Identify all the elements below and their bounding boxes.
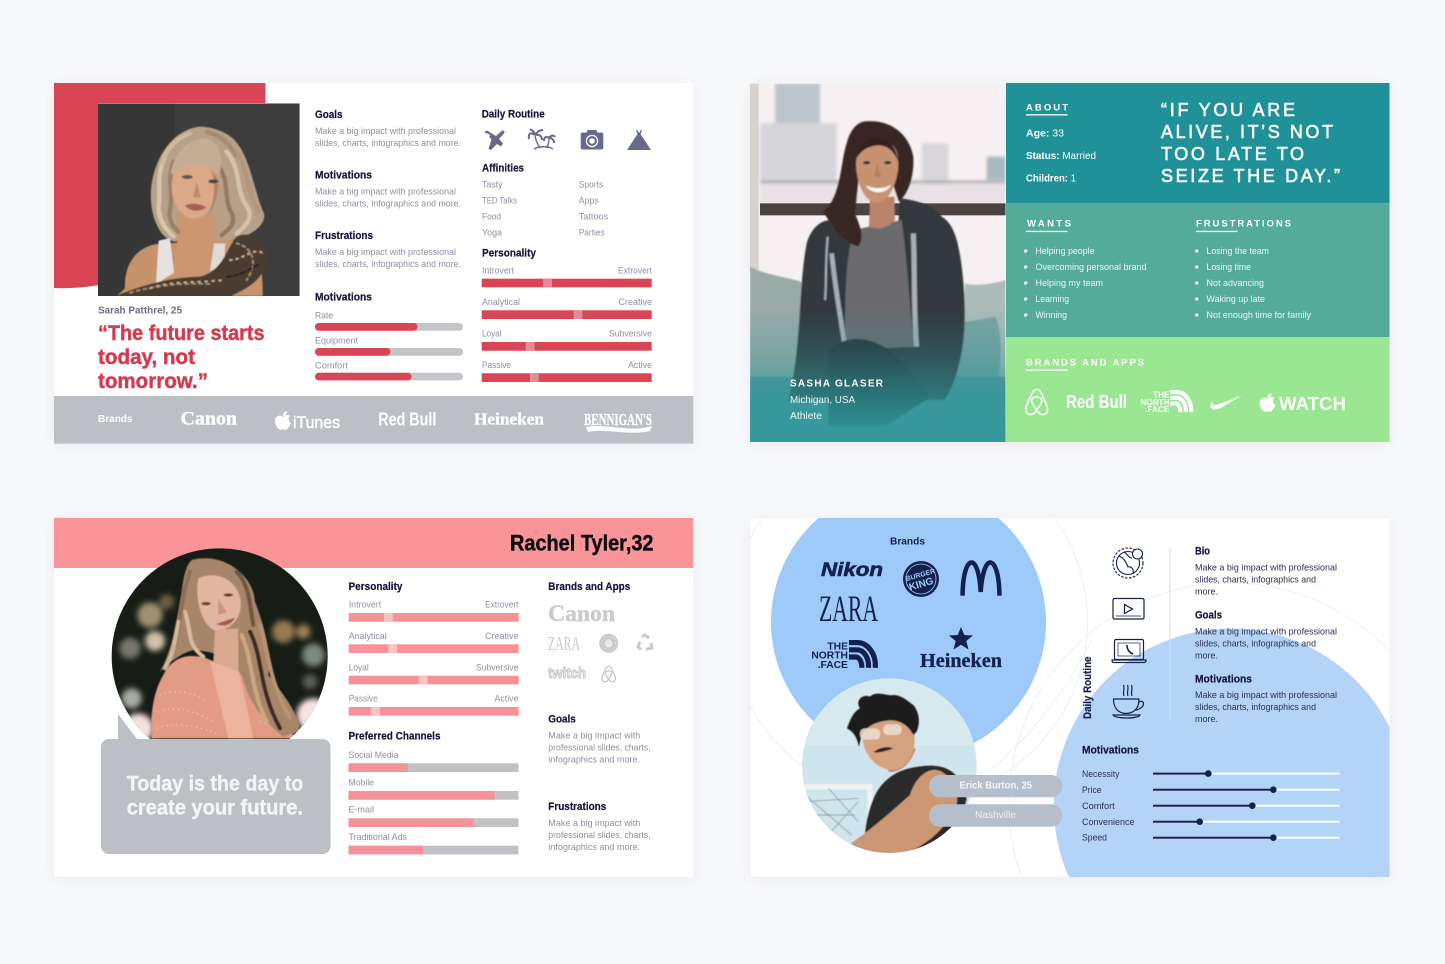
block: motivations text: slides, charts, infographics and more.: [315, 199, 461, 209]
name and location: [790, 379, 884, 422]
section: about: Children: 1: [1026, 172, 1076, 184]
block: frustrations: infographics and more.: [548, 842, 640, 852]
chart: personality sliders: Passive: [482, 360, 511, 370]
list: frustrations: Not enough time for family: [1206, 310, 1311, 320]
quote: ALIVE, IT’S NOT: [1161, 122, 1333, 142]
title: Rachel Tyler,32: [510, 531, 654, 556]
photo: Rachel portrait: [112, 548, 328, 739]
list: frustrations: Losing the team: [1206, 246, 1269, 256]
block: motivations text: more.: [1195, 714, 1218, 724]
divider line: [1169, 548, 1170, 720]
block: bio: more.: [1195, 586, 1218, 596]
block: frustrations: professional slides, charts,: [548, 830, 650, 840]
chart: personality sliders: Loyal: [482, 328, 502, 338]
block: frustrations: [315, 230, 461, 269]
logo: nike swoosh: [1211, 396, 1242, 410]
icon: airbnb: [602, 666, 615, 682]
block: goals: Goals: [548, 713, 576, 725]
icon: coffee cup: [1113, 685, 1144, 718]
block: brands and apps: Brands and Apps: [548, 581, 630, 593]
brand band: iTunes: [293, 413, 340, 432]
chart: motivations sliders: Motivations: [1082, 745, 1139, 757]
section: wants and frustrations: WANTS: [1027, 219, 1071, 230]
logo: north face: NORTH: [811, 651, 848, 662]
block: affinities: Parties: [579, 228, 605, 238]
section: wants and frustrations: FRUSTRATIONS: [1196, 219, 1291, 230]
block: goals: [548, 713, 650, 764]
quote: “The future starts: [98, 322, 264, 345]
block: goals: professional slides, charts,: [548, 742, 650, 752]
quote: [1161, 100, 1340, 186]
section: brands and apps: [1006, 337, 1390, 442]
chart: personality sliders: Subversive: [609, 328, 652, 338]
section: about: [1006, 83, 1390, 203]
logo: north face: [1140, 390, 1191, 414]
logo: burger king: BURGER: [905, 568, 936, 583]
chart: preferred channels: Mobile: [348, 777, 374, 787]
block: goals: [1195, 609, 1337, 660]
chart: personality sliders: Extrovert: [618, 266, 652, 276]
block: goals: infographics and more.: [548, 754, 640, 764]
photo: Sarah portrait: [98, 103, 300, 297]
block: affinities: [482, 163, 609, 238]
icon: tent: [627, 130, 651, 150]
list: wants: Overcoming personal brand: [1036, 262, 1146, 272]
logo: north face: THE: [1153, 390, 1170, 399]
location pill: [929, 804, 1062, 827]
name: Sarah Patthrel, 25: [98, 304, 182, 316]
block: goals: slides, charts, infographics and: [1195, 638, 1316, 648]
block: affinities: Food: [482, 212, 501, 222]
chart: motivations bars: Equipment: [315, 336, 358, 346]
list: frustrations: Losing time: [1206, 262, 1251, 272]
name and location: Michigan, USA: [790, 394, 855, 406]
block: frustrations: Frustrations: [548, 801, 606, 813]
header band: [54, 518, 693, 568]
chart: personality sliders: Analytical: [482, 297, 520, 307]
name and location: Athlete: [790, 410, 822, 422]
brands block: ZARA: [819, 589, 878, 630]
panel: Rachel Tyler persona: [54, 518, 693, 877]
block: bio: [1195, 545, 1337, 596]
brand band: Heineken: [474, 410, 545, 429]
chart: motivations bars: Comfort: [315, 360, 348, 370]
block: frustrations: Frustrations: [315, 230, 373, 242]
block: motivations text: [315, 170, 461, 209]
logo: north face: [811, 641, 875, 671]
brands block: Nikon: [821, 560, 883, 581]
block: goals: Make a big impact with: [548, 730, 640, 740]
icon: camera: [581, 130, 603, 150]
icon: starbucks: [599, 634, 618, 653]
quote: TOO LATE TO: [1161, 144, 1304, 164]
logo: mcdonalds arches: [962, 562, 1000, 596]
block: motivations text: [1195, 673, 1337, 724]
block: frustrations: [548, 801, 650, 852]
block: bio: slides, charts, infographics and: [1195, 574, 1316, 584]
chart: personality sliders: [482, 248, 652, 382]
icon: airbnb: [1026, 390, 1048, 414]
block: frustrations: Make a big impact with professional: [315, 247, 456, 257]
location pill: Nashville: [975, 810, 1016, 821]
chart: preferred channels: [348, 730, 518, 854]
brands block: Brands: [890, 535, 925, 547]
block: goals: Goals: [315, 109, 342, 121]
block: brands and apps: Canon: [548, 601, 615, 626]
quote: [98, 322, 264, 393]
logo: heineken: [920, 627, 1002, 672]
logo: twitch: twitch: [548, 665, 586, 682]
panel: Sasha Glaser persona: [750, 83, 1390, 442]
panel: Erick Burton persona: [750, 518, 1390, 877]
chart: preferred channels: Traditional Ads: [348, 832, 407, 842]
logo: heineken: Heineken: [920, 650, 1002, 672]
chart: motivations sliders: Speed: [1082, 833, 1107, 843]
logo: north face: THE: [827, 641, 848, 652]
chart: preferred channels: Social Media: [348, 750, 399, 760]
block: affinities: Affinities: [482, 163, 524, 175]
block: bio: Bio: [1195, 545, 1210, 557]
block: goals: Make a big impact with professional: [1195, 626, 1337, 636]
chart: motivations sliders: Necessity: [1082, 769, 1120, 779]
list: frustrations: [1195, 246, 1311, 320]
block: frustrations: Make a big impact with: [548, 818, 640, 828]
chart: personality sliders: Creative: [485, 631, 518, 641]
quote: “IF YOU ARE: [1161, 100, 1295, 120]
section: about: ABOUT: [1026, 102, 1068, 113]
chart: motivations bars: Rate: [315, 311, 333, 321]
name pill: [929, 775, 1062, 797]
red backdrop shape: [54, 83, 266, 288]
block: goals: Make a big impact with professional: [315, 126, 456, 136]
chart: preferred channels: E-mail: [348, 805, 374, 815]
chart: personality sliders: Active: [628, 360, 652, 370]
list: wants: [1024, 246, 1146, 320]
heading: daily routine: Daily Routine: [482, 109, 545, 121]
logo: north face: .FACE: [818, 660, 848, 671]
section: wants and frustrations: [1006, 203, 1390, 337]
chart: motivations sliders: Price: [1082, 785, 1102, 795]
block: motivations text: Make a big impact with professional: [1195, 690, 1337, 700]
speech bubble quote: [101, 714, 330, 854]
quote: today, not: [98, 346, 195, 369]
chart: personality sliders: Introvert: [349, 600, 382, 610]
brand band: BENNIGAN'S: [584, 410, 652, 429]
chart: personality sliders: Analytical: [349, 631, 387, 641]
icon: video player: [1113, 598, 1144, 619]
logo: north face: .FACE: [1145, 405, 1170, 414]
brands block: [811, 535, 1002, 672]
chart: personality sliders: Extrovert: [485, 600, 519, 610]
block: affinities: Tasty: [482, 180, 503, 190]
speech bubble quote: Today is the day to: [127, 772, 303, 795]
chart: personality sliders: Creative: [618, 297, 652, 307]
chart: motivations bars: [315, 292, 463, 380]
brand band: Brands: [98, 413, 133, 425]
block: goals: slides, charts, infographics and more.: [315, 138, 461, 148]
chart: preferred channels: Preferred Channels: [348, 730, 440, 742]
chart: motivations sliders: Convenience: [1082, 817, 1134, 827]
icon: palm trees: [529, 130, 555, 149]
block: brands and apps: [548, 581, 652, 682]
speech bubble quote: create your future.: [127, 796, 303, 819]
chart: personality sliders: Personality: [482, 248, 537, 260]
chart: personality sliders: Introvert: [482, 266, 514, 276]
logo: apple watch: WATCH: [1279, 394, 1346, 414]
quote: tomorrow.”: [98, 370, 208, 393]
panel: Sarah Patthrel persona: [54, 83, 693, 444]
section: about: Status: Married: [1026, 150, 1096, 162]
block: affinities: Apps: [579, 196, 599, 206]
section: about: Age: 33: [1026, 128, 1064, 140]
block: brands and apps: ZARA: [548, 633, 580, 655]
list: wants: Helping people: [1036, 246, 1094, 256]
logo: north face: NORTH: [1140, 398, 1170, 407]
chart: personality sliders: Loyal: [349, 662, 369, 672]
icon: airplane: [484, 130, 504, 150]
block: goals: Goals: [1195, 609, 1222, 621]
list: wants: Learning: [1036, 294, 1069, 304]
block: motivations text: Make a big impact with professional: [315, 187, 456, 197]
block: bio: Make a big impact with professional: [1195, 562, 1337, 572]
circles backdrop: [750, 518, 1390, 877]
list: wants: Helping my team: [1036, 278, 1103, 288]
block: motivations text: slides, charts, infographics and: [1195, 702, 1316, 712]
rotated label: daily routine: Daily Routine: [1082, 656, 1094, 719]
logo: burger king: [903, 561, 939, 597]
block: goals: [315, 109, 461, 148]
chart: personality sliders: Personality: [348, 581, 403, 593]
chart: motivations sliders: Comfort: [1082, 801, 1115, 811]
list: frustrations: Waking up late: [1206, 294, 1265, 304]
block: affinities: Sports: [579, 180, 604, 190]
block: affinities: TED Talks: [482, 196, 517, 206]
chart: personality sliders: Active: [494, 694, 518, 704]
block: goals: more.: [1195, 650, 1218, 660]
section: brands and apps: BRANDS AND APPS: [1026, 358, 1144, 369]
block: motivations text: Motivations: [315, 170, 372, 182]
chart: motivations sliders: [1082, 745, 1339, 843]
block: affinities: Tattoos: [579, 212, 609, 222]
name and location: SASHA GLASER: [790, 379, 884, 390]
brand band: [54, 396, 693, 444]
list: wants: Winning: [1036, 310, 1067, 320]
logo: burger king: KING: [908, 576, 935, 593]
brand band: Red Bull: [378, 409, 436, 429]
block: motivations text: Motivations: [1195, 673, 1252, 685]
brand band: Canon: [180, 409, 237, 430]
photo: Erick portrait: [802, 678, 977, 854]
block: frustrations: slides, charts, infographics and more.: [315, 259, 461, 269]
list: frustrations: Not advancing: [1206, 278, 1264, 288]
chart: personality sliders: Subversive: [476, 662, 518, 672]
block: affinities: Yoga: [482, 228, 503, 238]
icon: globe: [1113, 548, 1143, 578]
section: brands and apps: Red Bull: [1066, 392, 1127, 412]
chart: personality sliders: [348, 581, 519, 716]
chart: motivations bars: Motivations: [315, 292, 372, 304]
icon: recycle: [638, 635, 652, 650]
chart: personality sliders: Passive: [349, 694, 378, 704]
quote: SEIZE THE DAY.”: [1161, 166, 1340, 186]
name pill: Erick Burton, 25: [960, 780, 1032, 792]
photo: Sasha on sofa with teal fade: [750, 83, 1006, 442]
icon: laptop: [1112, 640, 1146, 663]
